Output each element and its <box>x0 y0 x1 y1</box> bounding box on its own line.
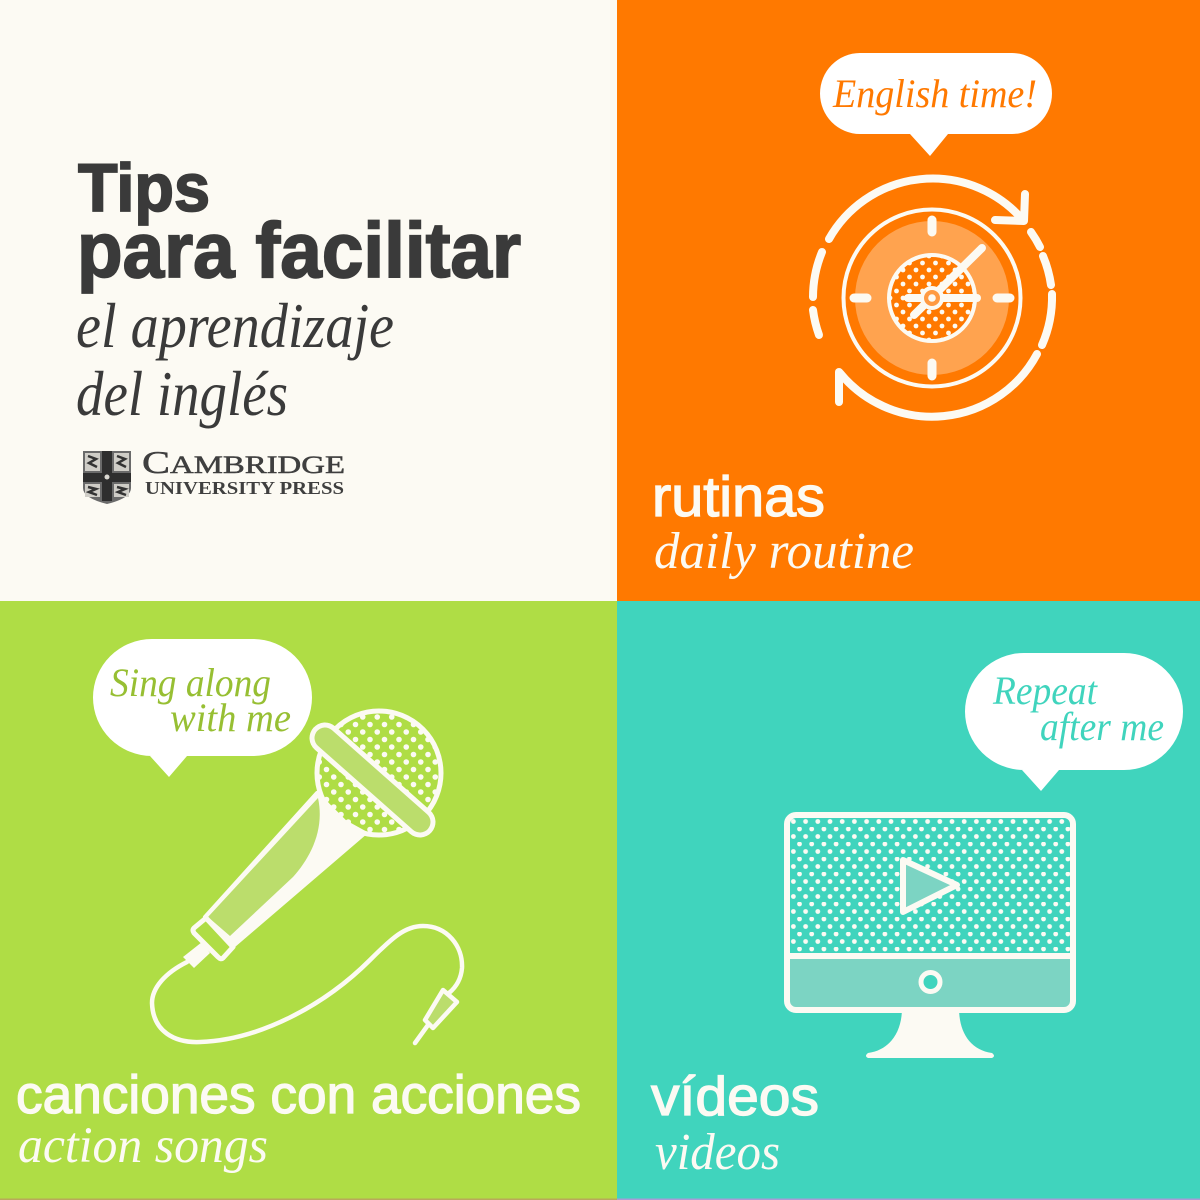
speech bubble: Repeat after me: Repeat <box>992 668 1098 713</box>
mic head <box>317 711 441 835</box>
speech bubble: Repeat after me <box>965 653 1183 791</box>
speech bubble: Repeat after me: after me <box>1040 704 1164 749</box>
panel: videos <box>617 601 1200 1200</box>
stand <box>866 1008 994 1058</box>
clock centre dotted <box>889 255 975 341</box>
subtitle: del inglés: del inglés <box>76 358 288 429</box>
hands <box>914 248 982 315</box>
heading: Tips: Tips <box>78 150 210 226</box>
label: vídeos: vídeos <box>651 1065 819 1127</box>
lower bezel <box>787 956 1073 1010</box>
logo text: Cambridge: C AMBRIDGE <box>142 444 345 480</box>
hour ticks <box>854 220 1010 376</box>
play icon <box>903 860 957 912</box>
subtitle: el aprendizaje: el aprendizaje <box>76 290 394 361</box>
icon: microphone <box>152 711 462 1043</box>
label: videos: videos <box>655 1124 780 1181</box>
icon: shield <box>83 451 131 504</box>
jack <box>425 990 457 1028</box>
logo text: University Press: UNIVERSITY PRESS <box>145 478 344 498</box>
speech bubble: English time: English time! <box>832 71 1037 116</box>
panel: title <box>0 0 617 601</box>
screen <box>787 815 1073 956</box>
logo: Cambridge University Press <box>83 444 345 504</box>
mic band <box>325 738 420 822</box>
icon: clock with cycle arrows <box>813 179 1052 417</box>
speech bubble: Sing along: with me <box>170 695 291 740</box>
icon: monitor <box>787 815 1073 1058</box>
heading: para facilitar: para facilitar <box>77 206 521 294</box>
speech bubble: Sing along: Sing along <box>110 660 271 705</box>
label: rutinas: rutinas <box>652 465 825 529</box>
cable <box>152 926 462 1042</box>
clock hub <box>922 288 942 308</box>
mic collar <box>193 918 233 959</box>
cycle arrow dashes <box>813 179 1052 417</box>
speech bubble: Sing along <box>93 639 312 777</box>
panel: rutinas <box>617 0 1200 601</box>
label: canciones con acciones: canciones con acciones <box>16 1065 581 1125</box>
panel: canciones <box>0 601 617 1200</box>
clock face <box>855 221 1009 375</box>
label: daily routine: daily routine <box>654 523 914 580</box>
outline <box>787 815 1073 1010</box>
mic connector <box>183 942 210 968</box>
label: action songs: action songs <box>18 1118 268 1174</box>
mic body <box>205 793 365 947</box>
power button <box>921 972 940 992</box>
speech bubble: English time <box>820 53 1052 156</box>
